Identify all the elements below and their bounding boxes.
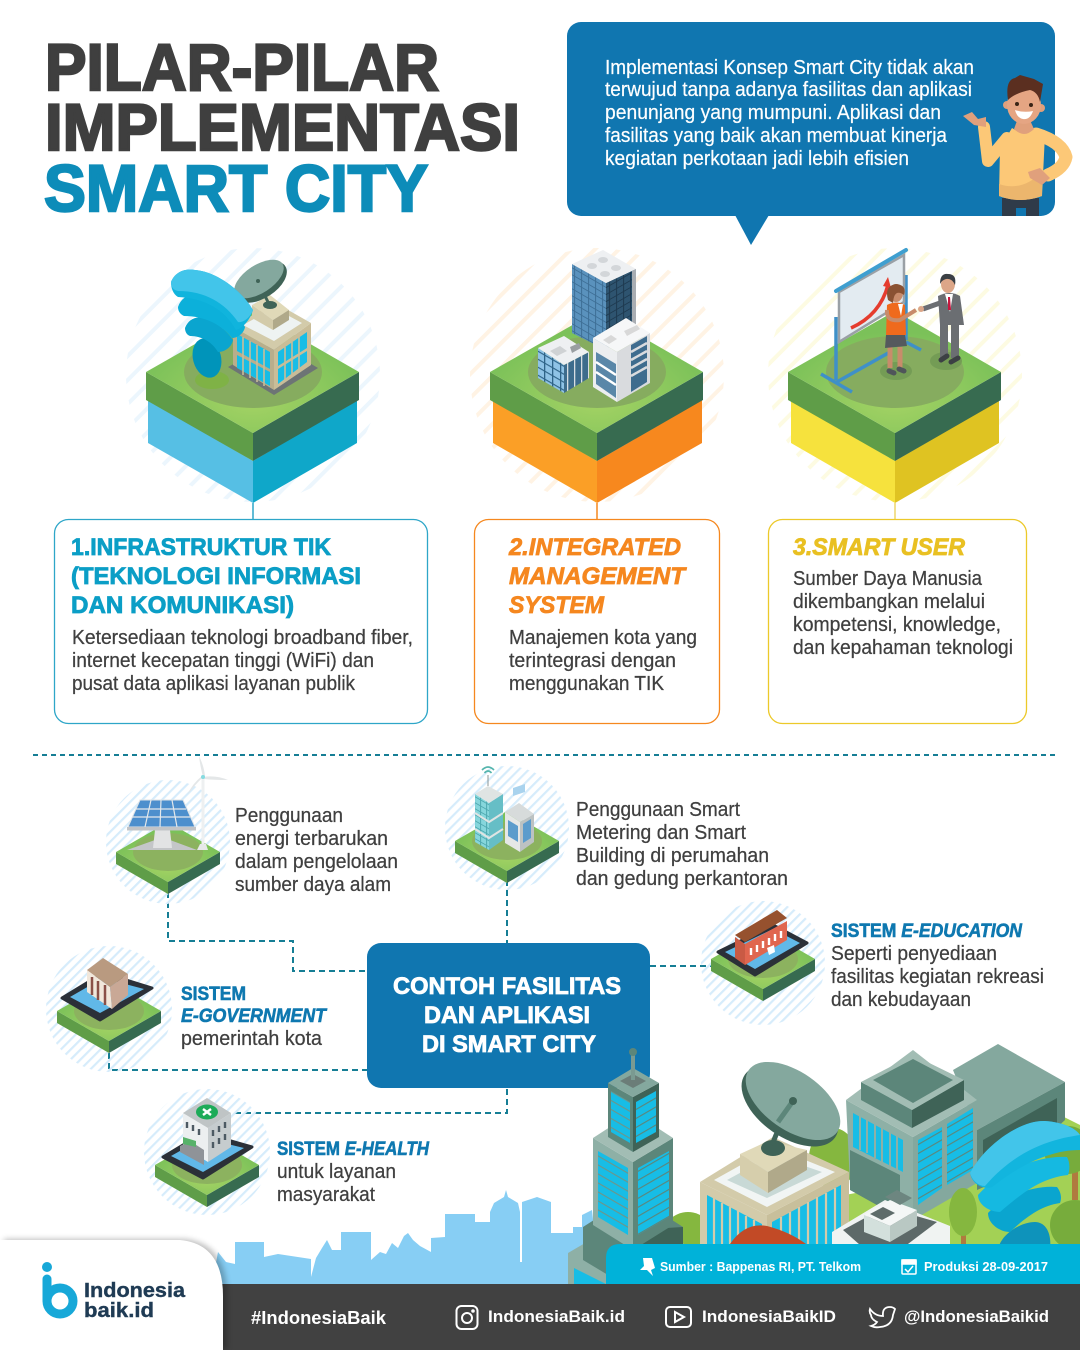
twitter handle: @IndonesiaBaikid (904, 1307, 1049, 1326)
icon: solar panel and wind turbine (127, 756, 228, 850)
logo wordmark: Indonesia (84, 1280, 186, 1302)
text: e-health: masyarakat (277, 1184, 375, 1206)
panel: pillar 2 text card (474, 520, 720, 724)
instagram handle: IndonesiaBaik.id (488, 1307, 625, 1326)
panel: central box (367, 943, 650, 1088)
beige dish building (700, 1062, 849, 1244)
icon: pin (640, 1258, 655, 1276)
text: smart metering: Building di perumahan (576, 845, 769, 867)
icon: smart buildings with wifi (475, 767, 534, 852)
source strip (606, 1244, 1080, 1284)
intro text: penunjang yang mumpuni. Aplikasi dan (605, 102, 941, 124)
body text: menggunakan TIK (509, 673, 665, 695)
icon: calendar (902, 1260, 916, 1274)
panel: pillar 2 illustration (470, 248, 724, 503)
icon: government building on tablet (62, 958, 152, 1020)
text: e-government: pemerintah kota (181, 1028, 323, 1050)
intro text: kegiatan perkotaan jadi lebih efisien (605, 148, 909, 170)
panel: e-health item (144, 1089, 430, 1215)
body text: dan kepahaman teknologi (793, 637, 1013, 659)
heading: integrated management system: 2.INTEGRATED (508, 534, 681, 561)
logo wordmark: baik.id (84, 1300, 154, 1322)
bush (673, 1212, 700, 1244)
icon: instagram (456, 1306, 478, 1329)
body text: kompetensi, knowledge, (793, 614, 1001, 636)
icon: businessman (918, 274, 964, 362)
text: smart metering: Metering dan Smart (576, 822, 746, 844)
body text: Ketersediaan teknologi broadband fiber, (72, 627, 413, 649)
skyscraper tower (568, 1048, 684, 1284)
heading: infrastruktur TIK: (TEKNOLOGI INFORMASI (71, 563, 361, 590)
text: smart metering (576, 799, 788, 890)
body text: Manajemen kota yang (509, 627, 697, 649)
icon: wifi symbol (171, 270, 253, 381)
icon: indonesiabaik logo mark (42, 1262, 73, 1314)
icon: striped office block (593, 318, 650, 402)
heading: infrastruktur TIK (71, 534, 361, 619)
illustration: isometric city (568, 1044, 1080, 1290)
tree (809, 1129, 850, 1186)
main teal office building (846, 1050, 977, 1220)
intro text: fasilitas yang baik akan membuat kinerja (605, 125, 948, 147)
body text (72, 627, 413, 695)
body text: dikembangkan melalui (793, 591, 985, 613)
text: e-government: SISTEM (181, 984, 246, 1005)
source text: Sumber : Bappenas RI, PT. Telkom (660, 1259, 861, 1274)
panel: e-government item (46, 946, 327, 1072)
text: smart metering: Penggunaan Smart (576, 799, 740, 821)
text: e-government: E-GOVERNMENT (181, 1006, 327, 1027)
text: e-education: fasilitas kegiatan rekreasi (831, 966, 1044, 988)
hashtag: #IndonesiaBaik (251, 1308, 387, 1328)
text: renewable energy: sumber daya alam (235, 874, 391, 896)
title: SMART CITY (44, 151, 428, 225)
intro text: terwujud tanpa adanya fasilitas dan aplikasi (605, 79, 972, 101)
intro text (605, 57, 974, 170)
text: renewable energy: energi terbarukan (235, 828, 388, 850)
icon: low office block (538, 336, 589, 393)
heading: contoh fasilitas: DI SMART CITY (422, 1031, 596, 1058)
title: PILAR-PILAR (45, 30, 439, 104)
text: smart metering: dan gedung perkantoran (576, 868, 788, 890)
icon: twitter (870, 1307, 895, 1327)
big wifi symbol (970, 1121, 1080, 1250)
body text (509, 627, 697, 695)
text: e-education: dan kebudayaan (831, 989, 971, 1011)
body text (793, 568, 1013, 659)
heading: smart user: 3.SMART USER (793, 534, 966, 561)
text: e-education (831, 921, 1044, 1011)
text: e-health: untuk layanan (277, 1161, 396, 1183)
body text: terintegrasi dengan (509, 650, 676, 672)
youtube handle: IndonesiaBaikID (702, 1307, 836, 1326)
heading: integrated management system (508, 534, 687, 619)
heading: contoh fasilitas: CONTOH FASILITAS (393, 973, 621, 1000)
body text: pusat data aplikasi layanan publik (72, 673, 356, 695)
text: renewable energy (235, 805, 398, 896)
trees (949, 1126, 1080, 1250)
logo panel (0, 1239, 227, 1350)
text: renewable energy: Penggunaan (235, 805, 343, 827)
callout: intro speech bubble (567, 22, 1066, 245)
panel: pillar 3 illustration (768, 248, 1022, 503)
text: e-government (181, 984, 327, 1050)
title (44, 30, 520, 225)
production date text: Produksi 28-09-2017 (924, 1259, 1048, 1274)
text: e-education: Seperti penyediaan (831, 943, 997, 965)
heading: integrated management system: MANAGEMENT (509, 563, 687, 590)
intro text: Implementasi Konsep Smart City tidak akan (605, 57, 974, 79)
icon: businesswoman (885, 284, 916, 373)
icon: presenter man (963, 75, 1066, 216)
panel: e-education item (701, 901, 1044, 1025)
heading: infrastruktur TIK: DAN KOMUNIKASI) (71, 592, 294, 619)
body text: Sumber Daya Manusia (793, 568, 983, 590)
text: e-health: SISTEM E-HEALTH (277, 1139, 430, 1160)
back grey building (953, 1044, 1065, 1190)
text: e-health (277, 1139, 430, 1206)
icon: whiteboard with growth chart (821, 250, 921, 392)
city skyline silhouette (212, 1190, 600, 1284)
icon: school on tablet (718, 910, 807, 975)
text: renewable energy: dalam pengelolaan (235, 851, 398, 873)
panel: pillar 1 illustration (126, 248, 380, 503)
panel: pillar 3 text card (768, 520, 1026, 724)
icon: building with dish (228, 252, 318, 395)
heading: contoh fasilitas (393, 973, 621, 1058)
footer bar (0, 1284, 1080, 1350)
dashed connectors to central box (109, 880, 711, 1113)
logo wordmark (84, 1280, 186, 1322)
text: e-education: SISTEM E-EDUCATION (831, 921, 1023, 942)
heading: infrastruktur TIK: 1.INFRASTRUKTUR TIK (71, 534, 332, 561)
white low building (832, 1190, 950, 1250)
icon: youtube (666, 1307, 691, 1327)
panel: renewable energy item (106, 756, 398, 904)
panel: smart metering item (445, 766, 788, 890)
icon: tall glass tower (572, 250, 636, 350)
heading: integrated management system: SYSTEM (509, 592, 605, 619)
icon: hospital on tablet (163, 1098, 252, 1178)
title: IMPLEMENTASI (45, 90, 520, 164)
heading: contoh fasilitas: DAN APLIKASI (424, 1002, 590, 1029)
connector lines (253, 503, 895, 519)
body text: internet kecepatan tinggi (WiFi) dan (72, 650, 374, 672)
panel: pillar 1 text card (54, 520, 428, 724)
